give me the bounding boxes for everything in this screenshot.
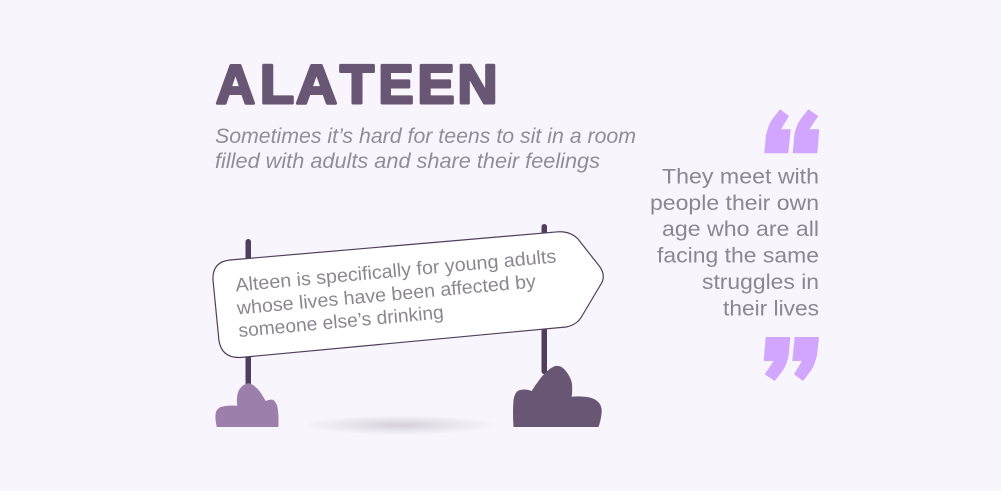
- quote text: They meet with: [662, 166, 819, 188]
- title: L: [260, 53, 294, 115]
- title: T: [340, 53, 374, 115]
- quote text: struggles in: [702, 271, 819, 294]
- quote text: [650, 166, 819, 320]
- sign text: Alteen is specifically for young adults: [235, 246, 557, 296]
- subtitle: filled with adults and share their feelings: [215, 150, 601, 173]
- subtitle: [215, 125, 636, 173]
- left post: [246, 239, 251, 389]
- quote text: their lives: [723, 298, 819, 320]
- quote text: facing the same: [657, 244, 819, 268]
- sign text: someone else’s drinking: [238, 302, 445, 342]
- opening quote mark: [764, 109, 819, 153]
- small bush: [215, 383, 279, 427]
- quote text: people their own: [650, 192, 819, 215]
- closing quote mark: [764, 337, 819, 381]
- large bush: [513, 366, 602, 427]
- title: E: [378, 53, 414, 115]
- right post: [542, 224, 547, 374]
- sign board: [213, 232, 603, 358]
- title: [216, 53, 498, 115]
- title: N: [458, 53, 498, 115]
- sign text: whose lives have been affected by: [235, 271, 537, 320]
- title: E: [418, 53, 454, 115]
- quote text: age who are all: [662, 218, 819, 241]
- signpost: [213, 224, 603, 389]
- subtitle: Sometimes it’s hard for teens to sit in a room: [215, 125, 636, 148]
- sign text: [235, 246, 557, 342]
- title: A: [296, 53, 337, 115]
- title: A: [216, 53, 255, 115]
- ground shadow: [303, 415, 497, 435]
